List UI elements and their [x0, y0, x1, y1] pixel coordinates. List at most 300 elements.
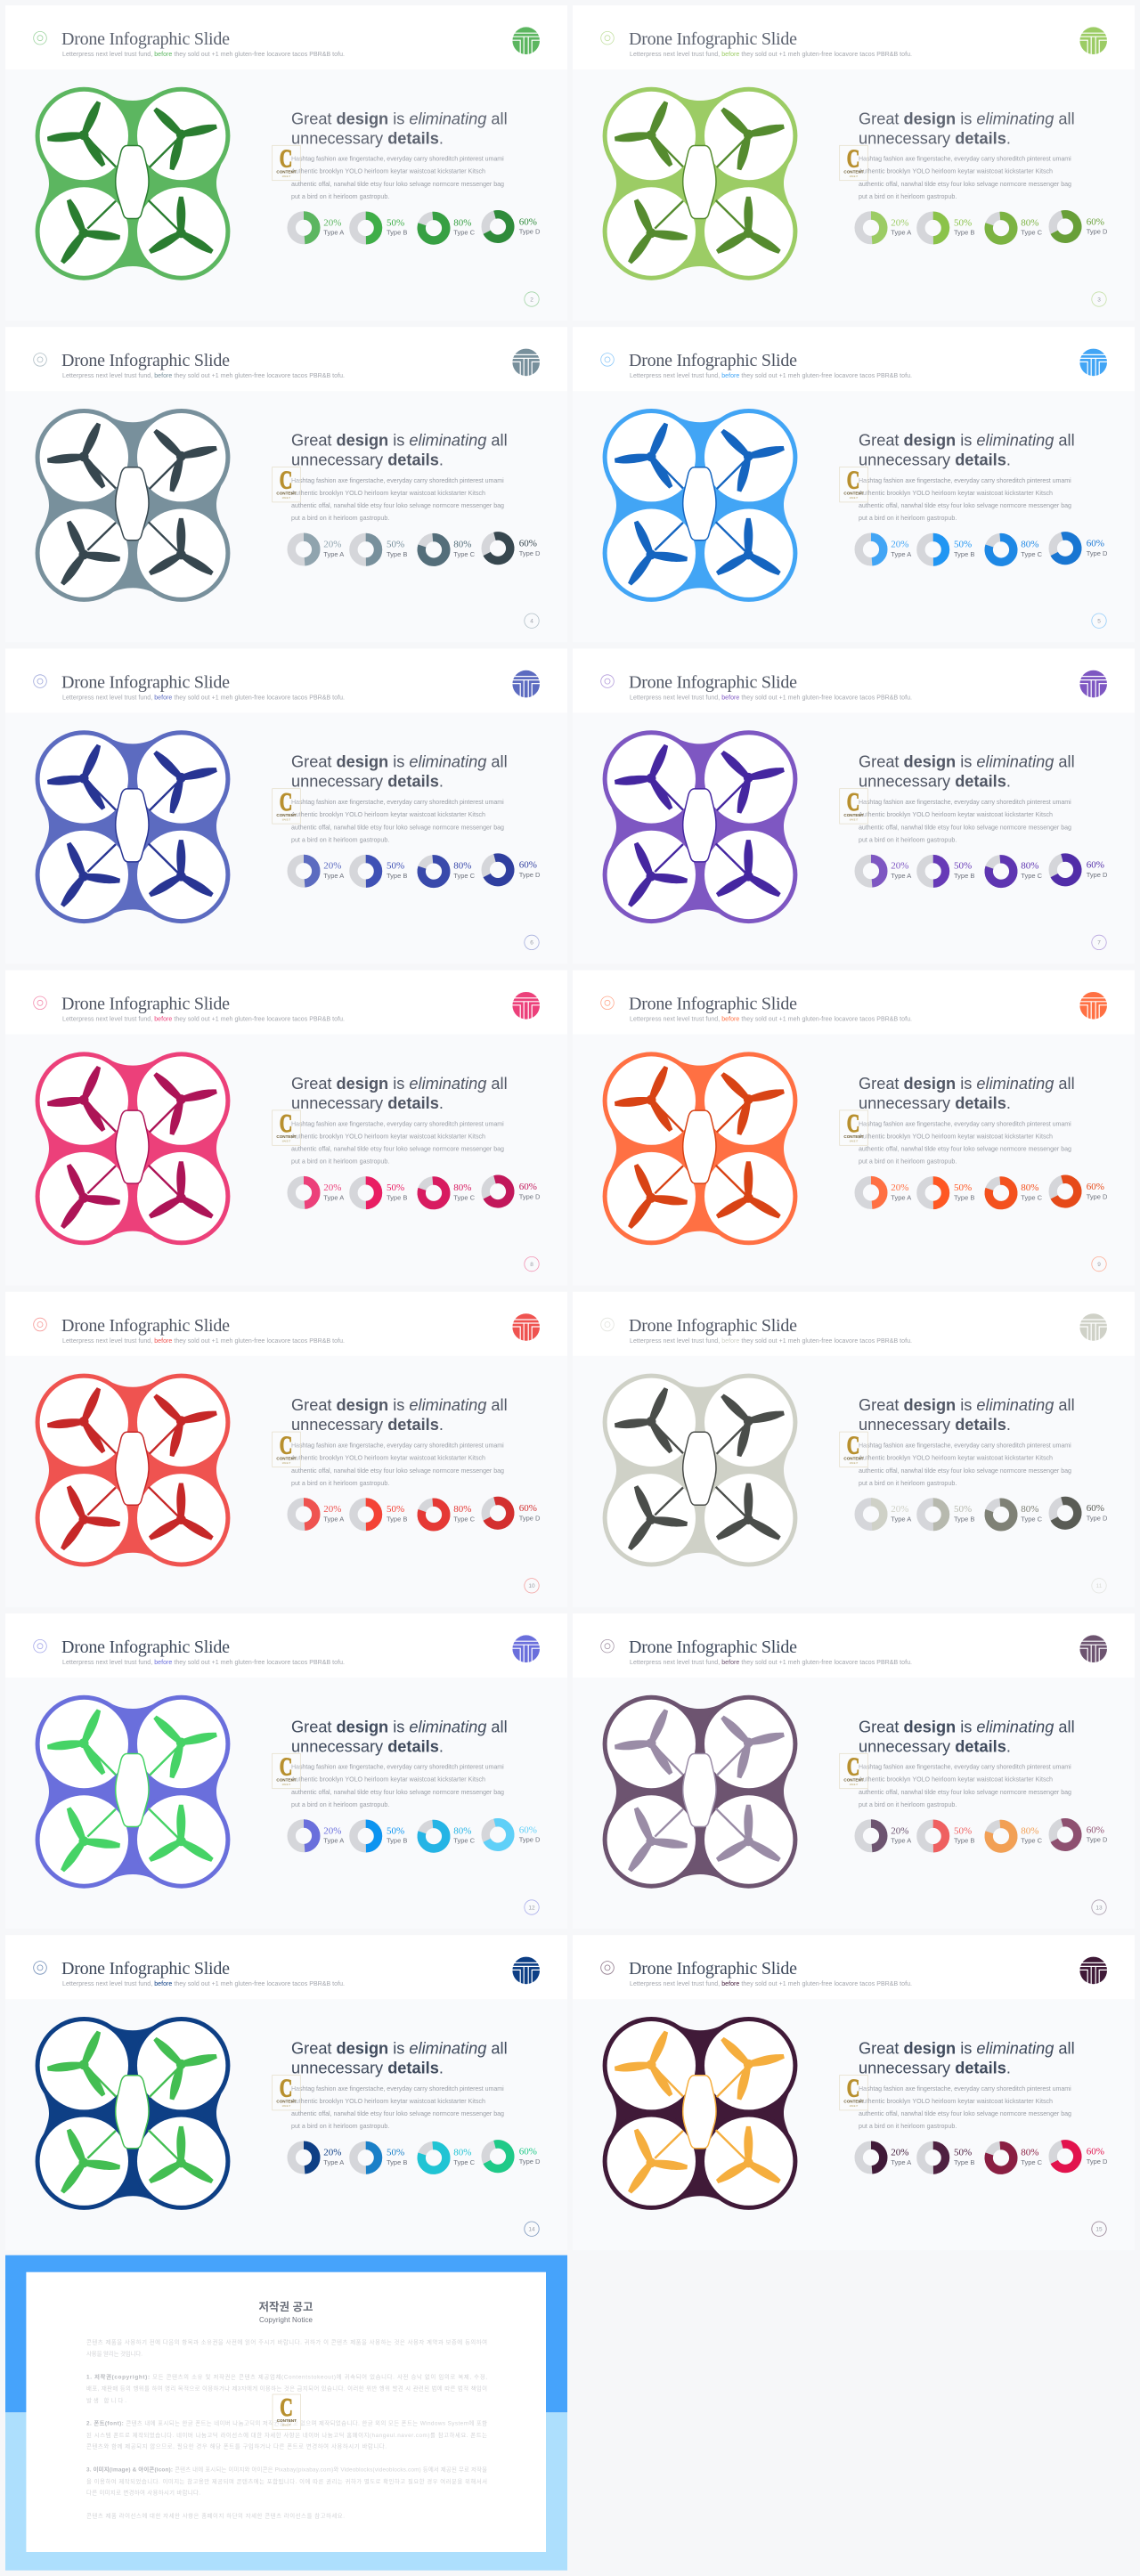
donut: type A — [291, 858, 344, 883]
body text: authentic offal, narwhal tilde etsy four loko selvage normcore messenger bag — [291, 502, 504, 509]
body text: authentic offal, narwhal tilde etsy four loko selvage normcore messenger bag — [291, 2110, 504, 2117]
body text: Hashtag fashion axe fingerstache, everyday carry shoreditch pinterest umami — [291, 1120, 504, 1127]
donut: type C: 80% — [1021, 2147, 1038, 2158]
drone illustration — [36, 1052, 230, 1245]
icon: target — [601, 1318, 614, 1331]
slide background — [573, 648, 1135, 963]
body text: authentic offal, narwhal tilde etsy four loko selvage normcore messenger bag — [291, 1467, 504, 1475]
page number — [1092, 1579, 1106, 1593]
slide background — [573, 1613, 1135, 1929]
body text: authentic offal, narwhal tilde etsy four loko selvage normcore messenger bag — [859, 181, 1071, 188]
donut: type D: Type D — [519, 2158, 541, 2166]
body text: authentic offal, narwhal tilde etsy four loko selvage normcore messenger bag — [291, 1789, 504, 1796]
body text: authentic offal, narwhal tilde etsy four loko selvage normcore messenger bag — [859, 1146, 1071, 1153]
heading: Great design is eliminating all — [291, 1396, 508, 1414]
donut: type B: Type B — [954, 872, 974, 880]
light blue background band — [5, 2412, 567, 2571]
watermark: MAKE IT — [850, 497, 859, 500]
body text: put a bird on it heirloom gastropub. — [859, 1158, 957, 1166]
donut: type D: 60% — [519, 1503, 537, 1514]
donut: type C — [420, 1180, 476, 1207]
donut: type A: Type A — [323, 1837, 344, 1845]
title: Drone Infographic Slide — [629, 1316, 797, 1336]
body text: put a bird on it heirloom gastropub. — [291, 515, 389, 522]
body text: authentic offal, narwhal tilde etsy four loko selvage normcore messenger bag — [291, 1146, 504, 1153]
donut: type A — [291, 1502, 344, 1526]
icon: logo — [1079, 1313, 1108, 1341]
donut: type A: 20% — [323, 1504, 341, 1515]
body text: Authentic brooklyn YOLO heirloom keytar waistcoat kickstarter Kitsch — [291, 811, 485, 818]
notice intro — [86, 2337, 487, 2357]
donut: type B: Type B — [387, 550, 407, 558]
donut: type A: 20% — [891, 2147, 908, 2158]
subtitle: Letterpress next level trust fund, before they sold out +1 meh gluten-free locavore tacos PBR&B tofu. — [630, 1017, 912, 1023]
donut: type A — [291, 215, 344, 240]
heading — [291, 1396, 508, 1434]
body text: Authentic brooklyn YOLO heirloom keytar waistcoat kickstarter Kitsch — [859, 1133, 1053, 1140]
white notice card — [26, 2272, 546, 2552]
donut: type B: Type B — [954, 229, 974, 237]
body text: put a bird on it heirloom gastropub. — [291, 836, 389, 843]
panel: slide 10 red — [5, 1292, 567, 1607]
watermark: CONTENT — [843, 1134, 864, 1139]
panel: slide 8 pink — [5, 971, 567, 1286]
title: Drone Infographic Slide — [61, 29, 230, 49]
page number: 7 — [1097, 940, 1101, 947]
watermark: C — [847, 1110, 859, 1138]
donut: type A: Type A — [891, 872, 911, 880]
donut: type C: Type C — [1021, 2158, 1043, 2166]
donut: type B — [354, 1502, 407, 1527]
heading: unnecessary details. — [291, 773, 444, 791]
donut: type B: 50% — [954, 1182, 972, 1193]
body text: Authentic brooklyn YOLO heirloom keytar waistcoat kickstarter Kitsch — [291, 168, 485, 175]
donut: type D: 60% — [1087, 216, 1104, 227]
notice heading: 저작권 공고 — [259, 2300, 313, 2313]
donut: type C: 80% — [1021, 1182, 1038, 1193]
donut: type A: 20% — [323, 1825, 341, 1836]
body text — [291, 1442, 504, 1487]
drone illustration — [603, 2017, 797, 2210]
heading — [291, 431, 508, 468]
body text: Hashtag fashion axe fingerstache, everyday carry shoreditch pinterest umami — [859, 1120, 1071, 1127]
title: Drone Infographic Slide — [61, 1637, 230, 1657]
donut: type B — [921, 1181, 974, 1205]
icon: target — [34, 1639, 46, 1653]
donut: type B — [354, 2145, 407, 2170]
body text: Authentic brooklyn YOLO heirloom keytar waistcoat kickstarter Kitsch — [859, 168, 1053, 175]
watermark: C — [280, 1432, 292, 1459]
watermark: C — [280, 1753, 292, 1781]
donut: type C — [988, 858, 1043, 885]
heading: unnecessary details. — [859, 1094, 1011, 1112]
donut: type D: Type D — [519, 549, 541, 557]
donut: type D: 60% — [519, 1182, 537, 1192]
panel: slide 11 stone — [573, 1292, 1135, 1607]
panel: slide 7 purple — [573, 648, 1135, 963]
donut: type B — [921, 1502, 974, 1527]
notice section: font: 된 시스템 폰트로 제작되었습니다. 네이버 나눔고딕 라이선스에 대한 자세한 사항은 네이버 나눔고딕 홈페이지(hangeul.naver.com)를 참고하세요. 폰트는 — [86, 2431, 487, 2439]
donut: type B: 50% — [954, 217, 972, 228]
donut: type B: Type B — [954, 550, 974, 558]
watermark — [273, 1753, 300, 1789]
body text: Hashtag fashion axe fingerstache, everyday carry shoreditch pinterest umami — [291, 1764, 504, 1771]
title: Drone Infographic Slide — [629, 29, 797, 49]
page number: 9 — [1097, 1262, 1101, 1268]
body text — [859, 799, 1071, 843]
watermark: MAKE IT — [850, 818, 859, 821]
body text: Authentic brooklyn YOLO heirloom keytar waistcoat kickstarter Kitsch — [291, 490, 485, 497]
watermark: CONTENT — [843, 1456, 864, 1460]
icon: logo — [1079, 27, 1108, 55]
donut: type B — [354, 859, 407, 883]
donut: type D: 60% — [1087, 1182, 1104, 1192]
title: Drone Infographic Slide — [629, 351, 797, 370]
heading: unnecessary details. — [859, 2059, 1011, 2076]
donut: type C: 80% — [1021, 540, 1038, 550]
icon: target — [34, 31, 46, 45]
donut: type B: Type B — [387, 1516, 407, 1524]
donut: type D — [1050, 212, 1108, 241]
donut: type C — [988, 2144, 1043, 2171]
donut: type D — [1050, 1176, 1108, 1207]
donut: type A: Type A — [891, 1193, 911, 1201]
body text — [291, 156, 504, 200]
donut: type A — [859, 215, 911, 240]
donut: type A: Type A — [323, 1193, 344, 1201]
watermark — [840, 467, 867, 502]
donut: type A: 20% — [891, 861, 908, 872]
slide background — [5, 5, 567, 321]
icon: target — [601, 1962, 614, 1974]
heading — [859, 431, 1075, 468]
donut: type A: Type A — [323, 872, 344, 880]
donut: type D: Type D — [1087, 228, 1108, 236]
notice section: image and icon: 3. 이미지(image) & 아이콘(icon): 콘텐츠 내에 표시되는 이미지와 아이콘은 Pixabay(pixabay.com)와 Videoblocks(videoblocks.com) 등에서 제공된 무료 저작물 — [86, 2466, 487, 2474]
body text — [859, 1764, 1071, 1808]
panel: slide 12 periwinkle and green — [5, 1613, 567, 1929]
heading: Great design is eliminating all — [291, 2039, 508, 2057]
icon: logo — [512, 1957, 541, 1985]
subtitle: Letterpress next level trust fund, before they sold out +1 meh gluten-free locavore tacos PBR&B tofu. — [62, 695, 345, 701]
drone illustration — [36, 2017, 230, 2210]
watermark: MAKE IT — [282, 2424, 291, 2427]
body text: Hashtag fashion axe fingerstache, everyday carry shoreditch pinterest umami — [291, 156, 504, 163]
heading — [859, 2039, 1075, 2076]
donut: type D: 60% — [519, 2146, 537, 2157]
icon: logo — [1079, 349, 1108, 377]
heading — [291, 1718, 508, 1755]
notice section: image and icon: 을 이용하여 제작되었습니다. 이미지는 참고용만 제공되며 콘텐츠에는 포함됩니다. 이에 따른 권리는 귀하가 별도로 확인하고 필요한 경우 여러분을 위해서서 — [86, 2477, 487, 2485]
slide background — [5, 1935, 567, 2250]
page number — [1092, 935, 1106, 950]
slide background — [5, 648, 567, 963]
page number: 5 — [1097, 618, 1101, 625]
donut: type A: Type A — [323, 2158, 344, 2166]
donut: type C: 80% — [1021, 217, 1038, 228]
body text: authentic offal, narwhal tilde etsy four loko selvage normcore messenger bag — [291, 824, 504, 831]
page number — [525, 1579, 539, 1593]
heading: Great design is eliminating all — [291, 1718, 508, 1735]
subtitle: Letterpress next level trust fund, before they sold out +1 meh gluten-free locavore tacos PBR&B tofu. — [630, 1981, 912, 1987]
donut: type B: Type B — [387, 229, 407, 237]
watermark: CONTENT — [843, 1777, 864, 1783]
page number: 10 — [528, 1583, 535, 1589]
heading: unnecessary details. — [291, 1416, 444, 1434]
icon: target — [601, 1639, 614, 1653]
drone illustration — [36, 730, 230, 923]
watermark — [273, 1110, 300, 1145]
heading — [291, 2039, 508, 2076]
donut: type A: Type A — [891, 1837, 911, 1845]
icon: target — [34, 353, 46, 366]
donut: type D: Type D — [1087, 1836, 1108, 1844]
donut: type B: Type B — [387, 1193, 407, 1201]
page number: 4 — [530, 618, 533, 625]
donut: type C — [420, 536, 476, 563]
subtitle: Letterpress next level trust fund, before they sold out +1 meh gluten-free locavore tacos PBR&B tofu. — [630, 1338, 912, 1345]
body text — [291, 1120, 504, 1166]
donut: type C: Type C — [453, 872, 476, 880]
body text — [859, 1442, 1071, 1487]
panel: slide 14 navy and green — [5, 1935, 567, 2250]
subtitle: Letterpress next level trust fund, before they sold out +1 meh gluten-free locavore tacos PBR&B tofu. — [630, 52, 912, 58]
body text: Authentic brooklyn YOLO heirloom keytar waistcoat kickstarter Kitsch — [291, 1776, 485, 1784]
body text: Hashtag fashion axe fingerstache, everyday carry shoreditch pinterest umami — [859, 799, 1071, 806]
watermark — [273, 2394, 301, 2429]
heading: unnecessary details. — [859, 451, 1011, 469]
watermark — [840, 1110, 867, 1145]
donut: type B: 50% — [387, 2147, 404, 2158]
notice section: copyright: 1. 저작권(copyright): 모든 콘텐츠의 소유 및 저작권은 콘텐츠 제공업체(Contentstokeout)에 귀속되어 있습니다. 사전 승낙 없이 임의로 복제, 수정, — [86, 2372, 487, 2380]
donut: type B: 50% — [387, 540, 404, 550]
body text: put a bird on it heirloom gastropub. — [859, 2123, 957, 2130]
body text: Authentic brooklyn YOLO heirloom keytar waistcoat kickstarter Kitsch — [859, 811, 1053, 818]
body text: Authentic brooklyn YOLO heirloom keytar waistcoat kickstarter Kitsch — [291, 2098, 485, 2105]
page number: 2 — [530, 297, 533, 303]
donut: type C — [988, 1180, 1043, 1207]
donut: type D: Type D — [1087, 1192, 1108, 1200]
page number — [525, 292, 539, 306]
drone illustration — [603, 87, 797, 280]
page number — [1092, 1256, 1106, 1272]
donut: type C: Type C — [453, 229, 476, 237]
body text: Authentic brooklyn YOLO heirloom keytar waistcoat kickstarter Kitsch — [859, 490, 1053, 497]
body text: Hashtag fashion axe fingerstache, everyday carry shoreditch pinterest umami — [859, 2085, 1071, 2092]
panel: slide 9 orange — [573, 971, 1135, 1286]
donut: type C: Type C — [453, 2158, 476, 2166]
watermark — [840, 2075, 867, 2110]
watermark: C — [280, 467, 292, 495]
donut: type B: Type B — [954, 1193, 974, 1201]
donut: type A — [291, 2145, 344, 2170]
page number: 13 — [1095, 1905, 1103, 1911]
icon: target — [601, 31, 614, 45]
panel: slide 6 indigo — [5, 648, 567, 963]
donut: type A — [859, 537, 911, 562]
donut: type C: 80% — [453, 861, 471, 872]
donut: type D: Type D — [519, 1515, 541, 1523]
notice section: copyright: 배포, 재판매 등의 행위를 하여 영리 목적으로 이용하거나 제3자에게 이용하는 것은 금지되어 있습니다. 이러한 위반 행위 발견 시 관련된 법에 따른 법적 책임이 — [86, 2385, 487, 2393]
panel: slide 3 lime — [573, 5, 1135, 321]
donut: type D — [1050, 1498, 1108, 1528]
subtitle: Letterpress next level trust fund, before they sold out +1 meh gluten-free locavore tacos PBR&B tofu. — [62, 1017, 345, 1023]
watermark: C — [847, 467, 859, 495]
donut: type D: 60% — [1087, 539, 1104, 549]
heading: Great design is eliminating all — [291, 110, 508, 127]
donut: type C: 80% — [453, 217, 471, 228]
notice closing line: 콘텐츠 제품 라이선스에 대한 자세한 사항은 홈페이지 하단의 자세한 콘텐츠 라이선스를 참고하세요. — [86, 2512, 345, 2520]
watermark: CONTENT — [843, 2100, 864, 2104]
notice section: font: 2. 폰트(font): 콘텐츠 내에 표시되는 한글 폰트는 네이버 나눔고딕의 저작권을 갖고 있으며 제작되었습니다. 한글 외의 모든 폰트는 Windows System에 포함 — [86, 2419, 487, 2427]
drone illustration — [36, 87, 230, 280]
heading: unnecessary details. — [291, 1094, 444, 1112]
donut: type A: 20% — [323, 2147, 341, 2158]
slide background — [5, 971, 567, 1286]
watermark: CONTENT — [276, 1456, 297, 1460]
body text: Hashtag fashion axe fingerstache, everyday carry shoreditch pinterest umami — [291, 799, 504, 806]
donut: type C: 80% — [453, 1182, 471, 1193]
donut: type A: Type A — [891, 229, 911, 237]
donut: type A — [859, 1502, 911, 1526]
body text — [859, 1120, 1071, 1166]
donut: type D — [483, 855, 541, 885]
subtitle: Letterpress next level trust fund, before they sold out +1 meh gluten-free locavore tacos PBR&B tofu. — [62, 1660, 345, 1666]
watermark: MAKE IT — [282, 1784, 291, 1786]
body text: put a bird on it heirloom gastropub. — [859, 1480, 957, 1487]
watermark: MAKE IT — [850, 1462, 859, 1465]
donut: type D: 60% — [519, 539, 537, 549]
donut: type C: 80% — [1021, 1504, 1038, 1515]
title: Drone Infographic Slide — [629, 995, 797, 1014]
donut: type C: 80% — [453, 540, 471, 550]
donut: type B — [921, 2145, 974, 2170]
watermark: MAKE IT — [850, 1784, 859, 1786]
donut: type D: 60% — [1087, 860, 1104, 871]
donut: type A: 20% — [891, 1504, 908, 1515]
body text — [291, 1764, 504, 1808]
watermark: MAKE IT — [850, 2105, 859, 2108]
donut: type C — [988, 215, 1043, 241]
heading: Great design is eliminating all — [859, 110, 1075, 127]
heading — [291, 110, 508, 147]
body text — [291, 2085, 504, 2130]
donut: type B — [354, 1824, 407, 1849]
donut: type A: Type A — [323, 229, 344, 237]
donut: type C — [420, 2144, 476, 2171]
page number — [525, 1256, 539, 1272]
page number — [1092, 292, 1106, 306]
watermark: C — [847, 1432, 859, 1459]
heading: Great design is eliminating all — [291, 432, 508, 450]
body text: Hashtag fashion axe fingerstache, everyday carry shoreditch pinterest umami — [859, 1442, 1071, 1450]
notice section: font: 콘텐츠와 함께 제공되지 않으므로, 필요한 경우 해당 폰트를 구입하거나 다른 폰트로 변경하여 사용하시기 바랍니다. — [86, 2442, 387, 2450]
watermark — [840, 1432, 867, 1467]
watermark: CONTENT — [276, 813, 297, 817]
page number: 3 — [1097, 297, 1101, 303]
donut: type C: Type C — [1021, 1193, 1043, 1201]
heading — [859, 753, 1075, 791]
body text: authentic offal, narwhal tilde etsy four loko selvage normcore messenger bag — [859, 2110, 1071, 2117]
subtitle: Letterpress next level trust fund, before they sold out +1 meh gluten-free locavore tacos PBR&B tofu. — [62, 1981, 345, 1987]
donut: type A: 20% — [891, 217, 908, 228]
subtitle: Letterpress next level trust fund, before they sold out +1 meh gluten-free locavore tacos PBR&B tofu. — [630, 373, 912, 379]
slide background — [573, 971, 1135, 1286]
donut: type B: 50% — [387, 1504, 404, 1515]
donut: type D — [483, 212, 541, 241]
title: Drone Infographic Slide — [61, 1959, 230, 1979]
donut: type B: Type B — [954, 2158, 974, 2166]
body text: put a bird on it heirloom gastropub. — [859, 515, 957, 522]
body text — [859, 2085, 1071, 2130]
donut: type C: 80% — [1021, 861, 1038, 872]
heading: Great design is eliminating all — [291, 1075, 508, 1093]
page number — [525, 1900, 539, 1914]
donut: type A: 20% — [323, 217, 341, 228]
icon: logo — [512, 1313, 541, 1341]
donut: type B: 50% — [954, 1825, 972, 1836]
icon: target — [34, 675, 46, 687]
body text: Authentic brooklyn YOLO heirloom keytar waistcoat kickstarter Kitsch — [859, 1776, 1053, 1784]
watermark: CONTENT — [276, 169, 297, 175]
title: Drone Infographic Slide — [61, 351, 230, 370]
body text: Authentic brooklyn YOLO heirloom keytar waistcoat kickstarter Kitsch — [859, 1455, 1053, 1462]
donut: type C: 80% — [453, 1825, 471, 1836]
heading: unnecessary details. — [859, 129, 1011, 147]
icon: logo — [1079, 1957, 1108, 1985]
page number: 15 — [1095, 2226, 1103, 2232]
page number: 11 — [1096, 1583, 1103, 1589]
heading: unnecessary details. — [291, 1737, 444, 1755]
subtitle: Letterpress next level trust fund, before they sold out +1 meh gluten-free locavore tacos PBR&B tofu. — [62, 373, 345, 379]
watermark — [273, 789, 300, 824]
watermark: C — [280, 1110, 292, 1138]
notice section: copyright — [86, 2372, 487, 2404]
donut: type C — [420, 1823, 476, 1849]
donut: type B: 50% — [954, 1504, 972, 1515]
heading — [291, 753, 508, 791]
icon: logo — [1079, 670, 1108, 698]
watermark: CONTENT — [276, 1777, 297, 1783]
watermark: C — [847, 145, 859, 173]
heading — [859, 1396, 1075, 1434]
donut: type B: 50% — [954, 2147, 972, 2158]
heading: Great design is eliminating all — [859, 1075, 1075, 1093]
donut: type A: 20% — [323, 540, 341, 550]
body text: put a bird on it heirloom gastropub. — [859, 1801, 957, 1808]
donut: type D — [1050, 533, 1108, 564]
body text: authentic offal, narwhal tilde etsy four loko selvage normcore messenger bag — [859, 824, 1071, 831]
body text: Hashtag fashion axe fingerstache, everyday carry shoreditch pinterest umami — [291, 477, 504, 484]
donut: type A: Type A — [323, 1516, 344, 1524]
heading — [859, 1718, 1075, 1755]
page number — [1092, 614, 1106, 628]
page number: 14 — [528, 2226, 535, 2232]
watermark: CONTENT — [843, 492, 864, 496]
slide background — [5, 327, 567, 642]
body text: Hashtag fashion axe fingerstache, everyday carry shoreditch pinterest umami — [859, 156, 1071, 163]
body text — [291, 477, 504, 522]
page number — [525, 935, 539, 950]
donut: type C: Type C — [453, 550, 476, 558]
watermark — [273, 467, 300, 502]
body text: authentic offal, narwhal tilde etsy four loko selvage normcore messenger bag — [291, 181, 504, 188]
panel: slide 5 blue — [573, 327, 1135, 642]
notice section: copyright: 발생 합니다. — [86, 2396, 126, 2404]
donut: type C: 80% — [1021, 1825, 1038, 1836]
body text: Hashtag fashion axe fingerstache, everyday carry shoreditch pinterest umami — [859, 1764, 1071, 1771]
donut: type C — [988, 1823, 1043, 1849]
